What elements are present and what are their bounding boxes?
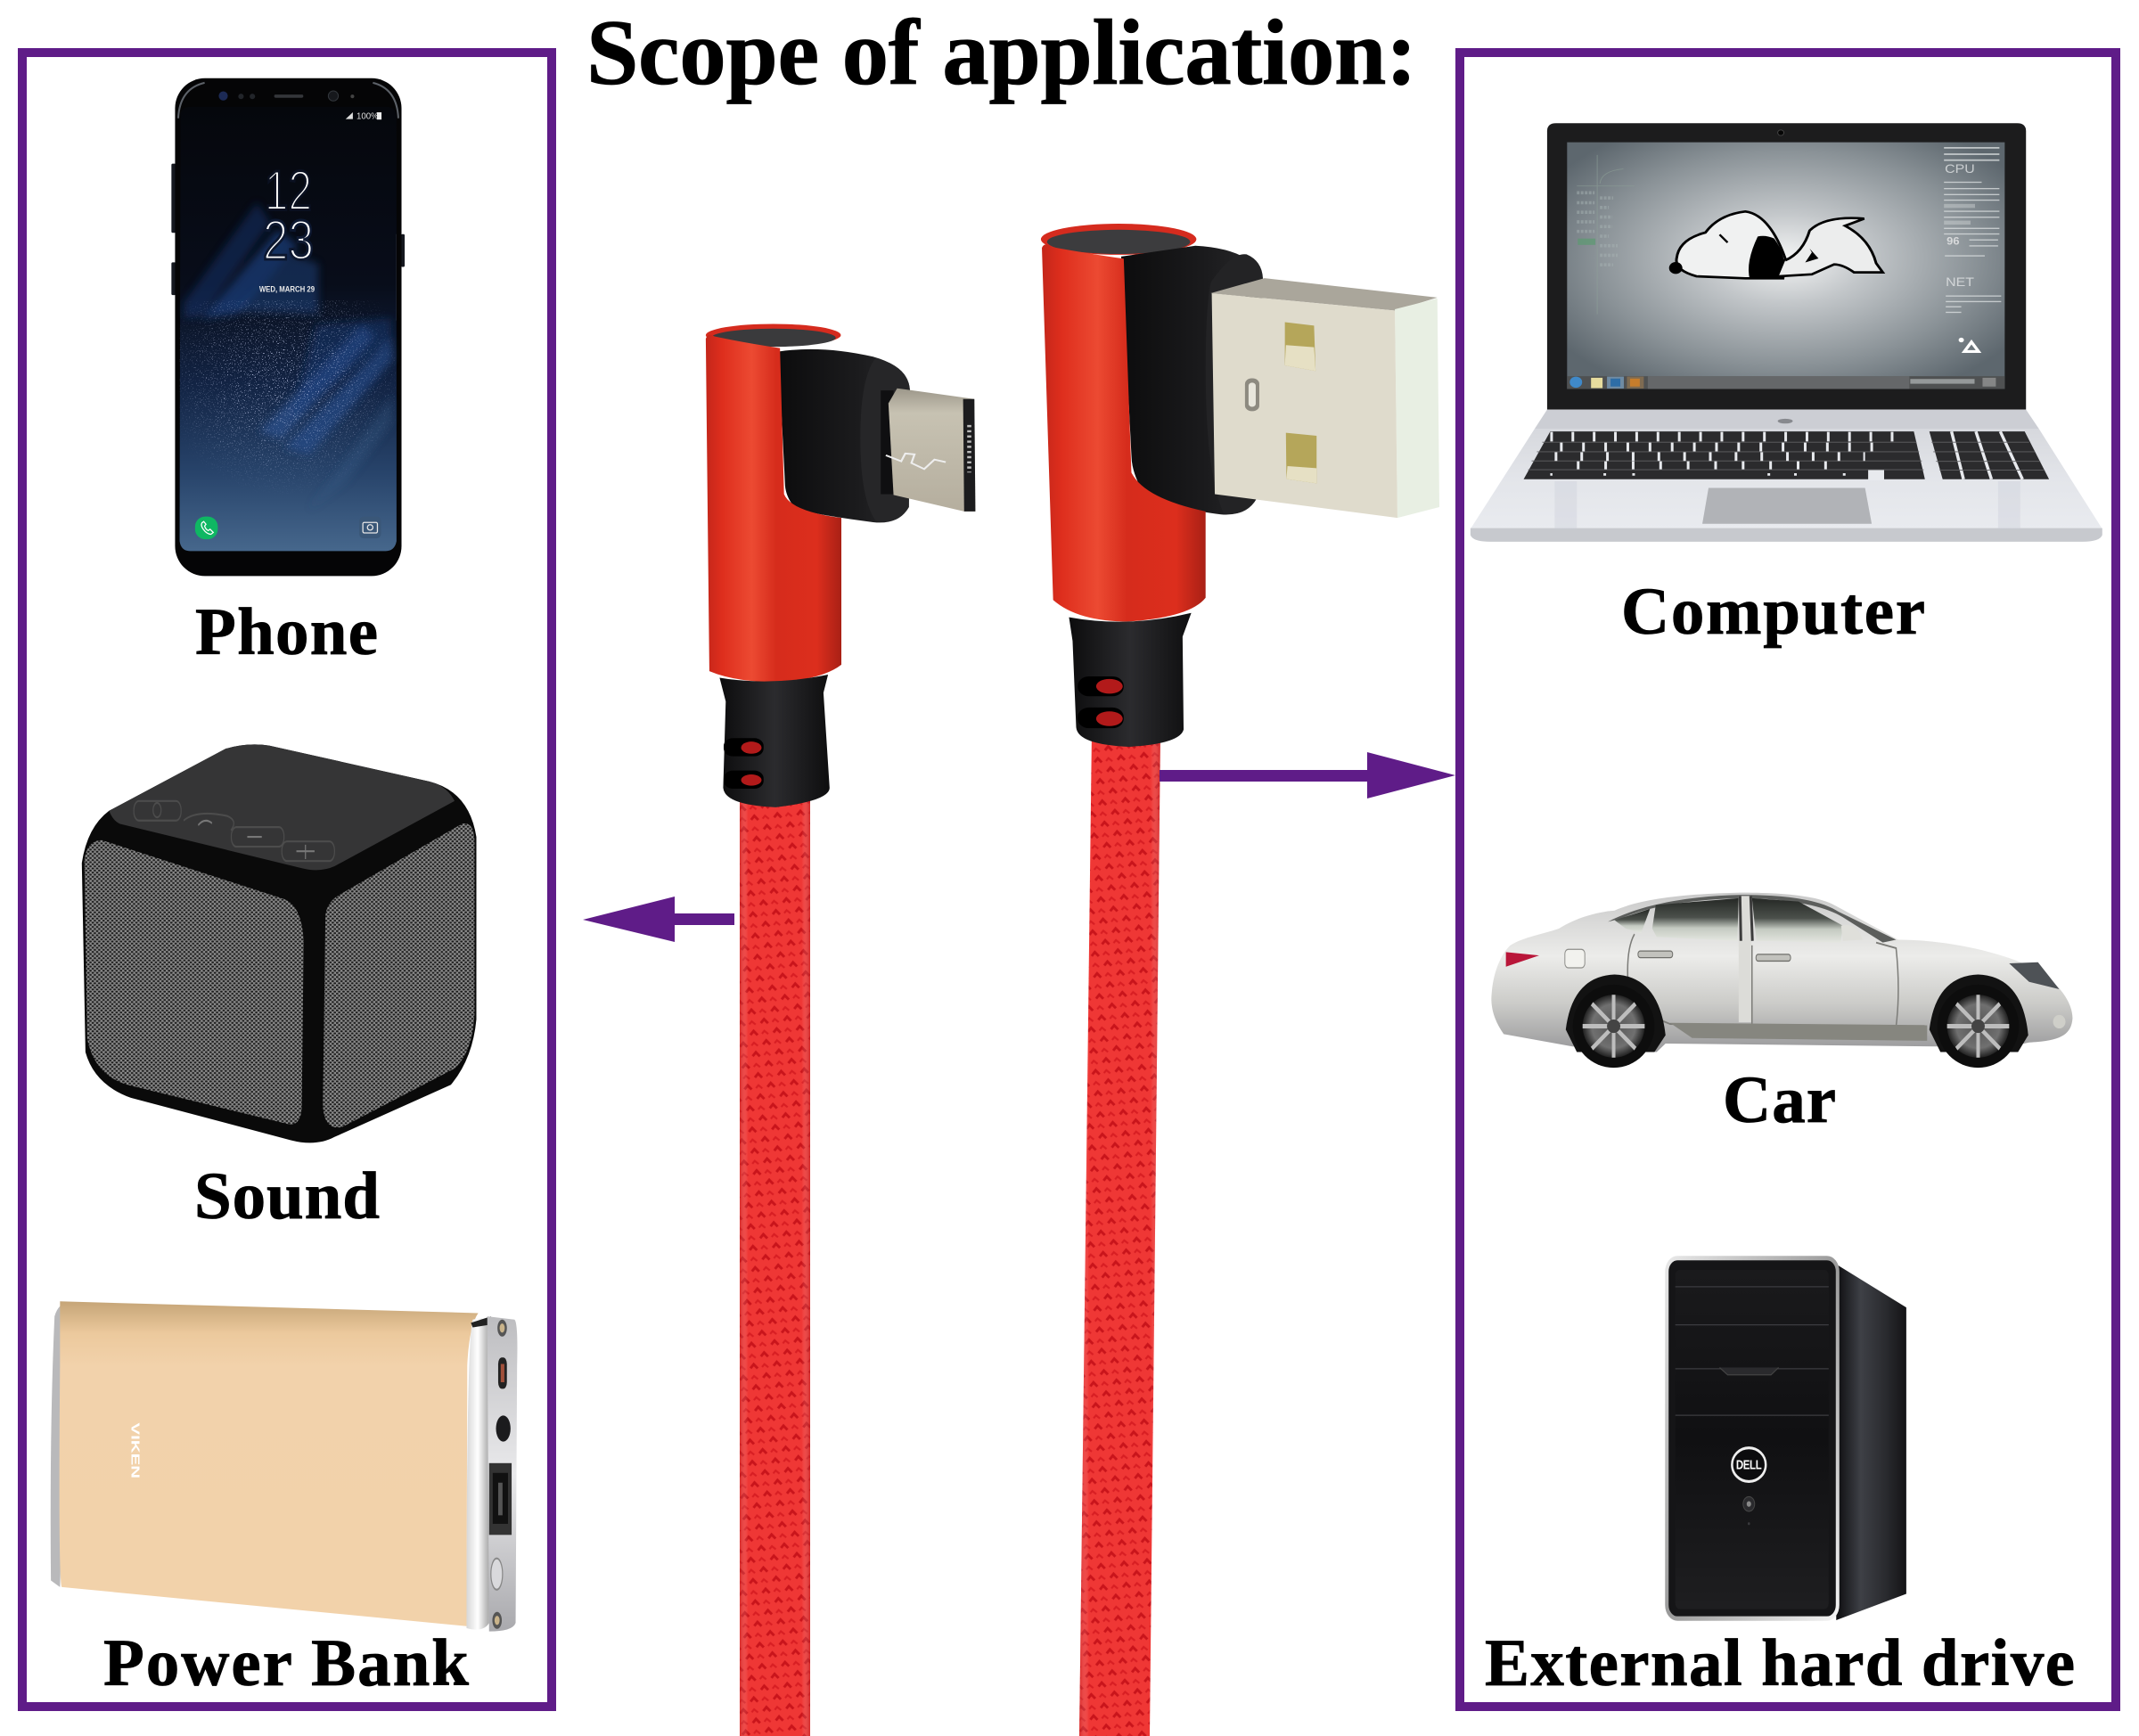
icon: phone (171, 78, 405, 576)
taskbar (1567, 376, 2004, 389)
label: Car: Car (1723, 1063, 1836, 1137)
rear wheel (1566, 975, 1666, 1068)
icon: car (1491, 893, 2072, 1068)
icon: power bank (51, 1301, 517, 1632)
side mirror (1841, 925, 1863, 941)
strain relief slots (1078, 676, 1124, 728)
wallpaper streaks (184, 202, 393, 509)
cable: left (740, 784, 810, 1736)
icon: LED (496, 1415, 511, 1442)
icon: phone: WED, MARCH 29 (259, 285, 315, 294)
front wheel (1930, 975, 2028, 1068)
keyboard numpad (1930, 431, 2049, 479)
desktop widgets: CPU (1945, 162, 1975, 176)
icon: laptop (1471, 123, 2102, 542)
icon: phone: 23 (263, 209, 314, 272)
cable: right (1079, 731, 1160, 1736)
snoopy wallpaper (1669, 211, 1883, 279)
label: Power Bank: Power Bank (103, 1626, 469, 1700)
connector: USB-A (1041, 224, 1439, 747)
arrow: to left panel (583, 897, 734, 942)
desktop widgets: 96 (1946, 235, 1960, 247)
desktop widgets (1944, 147, 2001, 313)
micro USB plug (886, 389, 975, 512)
icon: phone: 12 (265, 160, 312, 223)
desktop widgets: NET (1946, 275, 1974, 290)
icon: camera button (359, 517, 381, 538)
arrow: to right panel (1160, 752, 1455, 798)
title: Scope of application: (586, 0, 1417, 104)
icon: USB port (489, 1463, 512, 1535)
power button (1743, 1496, 1755, 1525)
icon: call button (195, 517, 217, 539)
Dell logo: DELL (1736, 1457, 1762, 1472)
label: Computer: Computer (1621, 575, 1925, 649)
icon: speaker buttons (134, 801, 334, 861)
icon: speaker (82, 744, 476, 1142)
icon: micro USB port (498, 1357, 507, 1388)
label: Phone: Phone (195, 595, 378, 669)
wallpaper stars (180, 300, 396, 509)
icon: recycle bin (1959, 338, 1979, 351)
label: Sound: Sound (194, 1159, 380, 1233)
touchpad (1702, 488, 1872, 524)
USB plug (1210, 278, 1439, 518)
icon: power bank: VIKEN (129, 1422, 142, 1478)
keyboard (1524, 431, 1925, 479)
panel: left devices (22, 53, 552, 1707)
connector: micro USB (706, 323, 975, 807)
icon: phone: 100% (356, 112, 379, 122)
panel: right devices (1460, 53, 2116, 1707)
strain relief slots (724, 738, 764, 789)
label: External hard drive: External hard drive (1485, 1626, 2075, 1700)
icon: desktop tower (1667, 1258, 1906, 1620)
icon: power button (491, 1559, 503, 1590)
Dell logo (1732, 1448, 1766, 1481)
